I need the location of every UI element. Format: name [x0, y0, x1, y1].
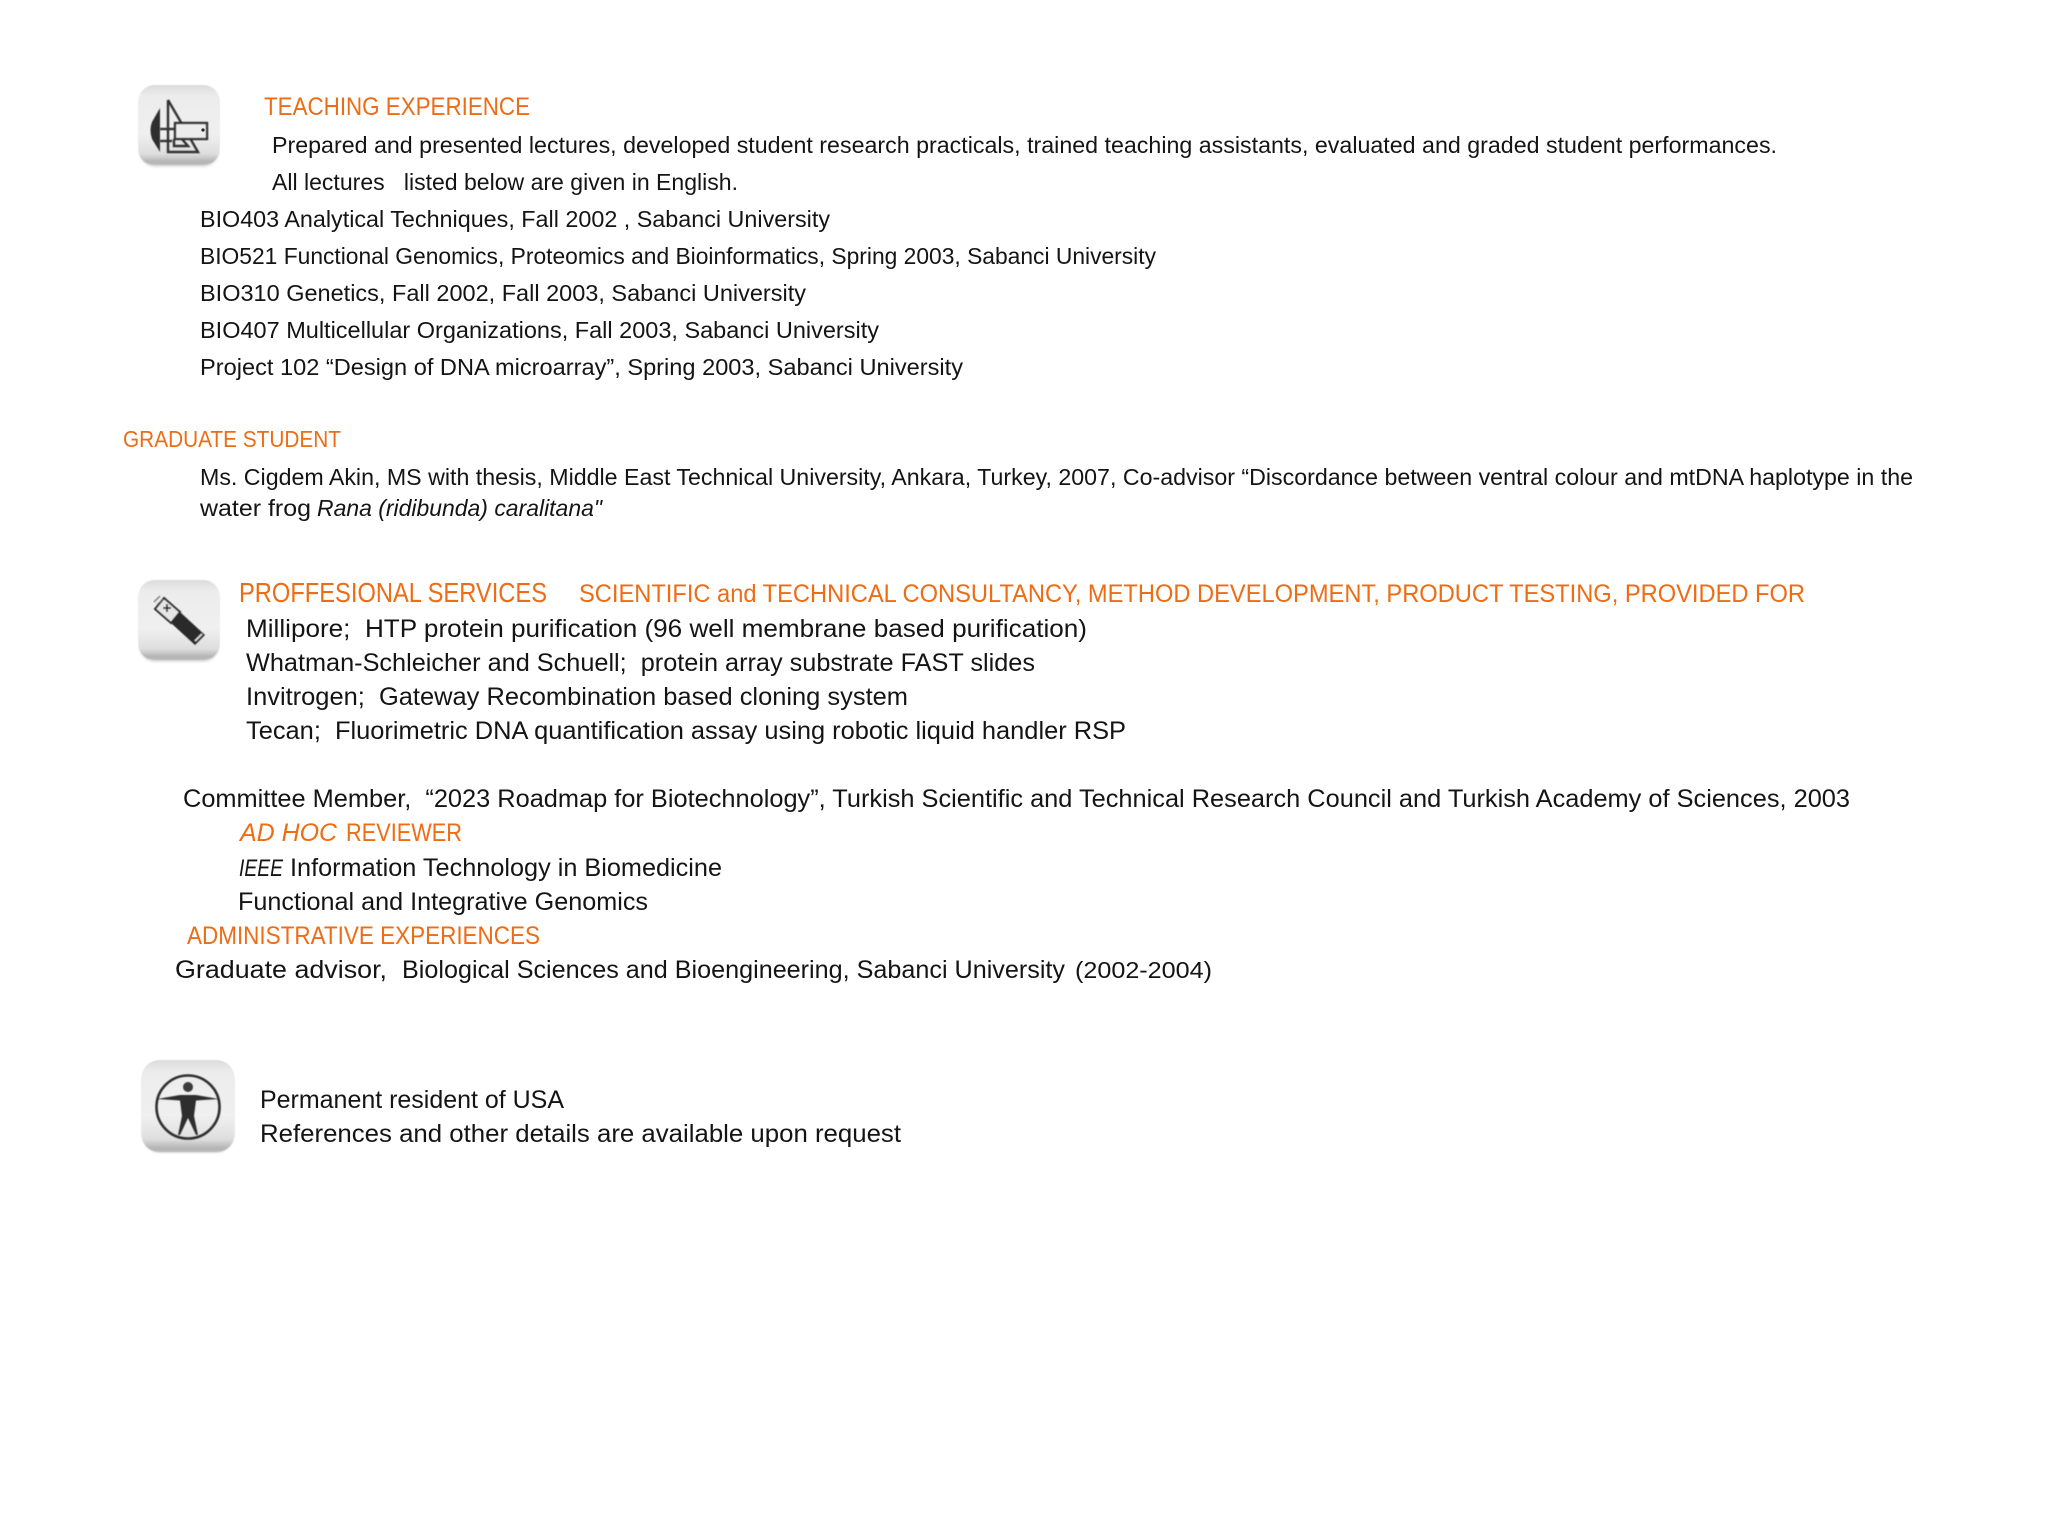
list: courses taught: BIO403 Analytical Techniques, Fall 2002 , Sabanci University — [200, 206, 831, 232]
list: courses taught: BIO521 Functional Genomics, Proteomics and Bioinformatics, Spring 2003, Sabanci University — [200, 243, 1156, 269]
list: consultancy clients: Millipore; HTP protein purification (96 well membrane based purification) — [246, 615, 1087, 643]
text: student details: water frog — [199, 495, 311, 521]
text: teaching summary: All lectures listed below are given in English. — [272, 169, 738, 195]
heading: ad hoc reviewer — [238, 819, 462, 847]
text: graduate advisor — [175, 956, 1212, 984]
text: residency and references — [260, 1086, 901, 1148]
list: consultancy clients: Tecan; Fluorimetric DNA quantification assay using robotic liquid handler RSP — [246, 717, 1126, 745]
panel: professional services — [138, 577, 1850, 984]
list: reviewed journals: Functional and Integrative Genomics — [238, 888, 648, 916]
heading: ad hoc reviewer: REVIEWER — [346, 819, 462, 847]
text: residency and references: References and other details are available upon request — [260, 1120, 901, 1148]
list: courses taught: BIO310 Genetics, Fall 2002, Fall 2003, Sabanci University — [200, 280, 807, 306]
list: reviewed journals: IEEE — [239, 855, 284, 882]
text: teaching summary: Prepared and presented lectures, developed student research practicals, trained teaching assistants, evaluated and graded student performances. — [272, 132, 1777, 158]
text: teaching summary — [272, 132, 1777, 195]
heading: consultancy: SCIENTIFIC and TECHNICAL CONSULTANCY, METHOD DEVELOPMENT, PRODUCT TESTING, PROVIDED FOR — [579, 580, 1805, 608]
text: graduate advisor: Graduate advisor, — [175, 956, 387, 984]
heading: teaching experience: TEACHING EXPERIENCE — [264, 93, 530, 121]
icon: human figure in circle — [142, 1060, 234, 1153]
text: student details: Ms. Cigdem Akin, MS with thesis, Middle East Technical University, Ankara, Turkey, 2007, Co-advisor “Discordance between ventral colour and mtDNA haplotype in the — [200, 464, 1913, 490]
panel: graduate student — [123, 426, 1913, 521]
list: reviewed journals — [238, 854, 722, 916]
icon: drafting tools — [138, 85, 220, 167]
heading: ad hoc reviewer: AD HOC — [238, 819, 338, 847]
list: courses taught — [200, 206, 1156, 380]
list: courses taught: BIO407 Multicellular Organizations, Fall 2003, Sabanci University — [200, 317, 879, 343]
list: consultancy clients: Invitrogen; Gateway Recombination based cloning system — [246, 683, 908, 711]
panel: personal details — [142, 1060, 901, 1153]
list: courses taught: Project 102 “Design of DNA microarray”, Spring 2003, Sabanci University — [200, 354, 963, 380]
list: reviewed journals: Information Technology in Biomedicine — [290, 854, 722, 882]
text: residency and references: Permanent resident of USA — [260, 1086, 564, 1114]
heading: graduate student: GRADUATE STUDENT — [123, 426, 341, 452]
heading: professional services: PROFFESIONAL SERVICES — [239, 577, 547, 608]
list: consultancy clients: Whatman-Schleicher and Schuell; protein array substrate FAST slides — [246, 649, 1035, 677]
heading: administrative experiences: ADMINISTRATIVE EXPERIENCES — [187, 922, 540, 950]
text: graduate advisor: Biological Sciences and Bioengineering, Sabanci University — [402, 956, 1066, 984]
icon: battery — [138, 580, 220, 662]
text: committee member: Committee Member, “2023 Roadmap for Biotechnology”, Turkish Scientific and Technical Research Council and Turkish Academy of Sciences, 2003 — [183, 785, 1850, 813]
text: student details — [199, 464, 1913, 521]
list: consultancy clients — [246, 615, 1126, 745]
text: graduate advisor: (2002-2004) — [1075, 957, 1212, 983]
panel: teaching experience — [138, 85, 1777, 380]
text: student details: Rana (ridibunda) caralitana" — [317, 495, 604, 521]
